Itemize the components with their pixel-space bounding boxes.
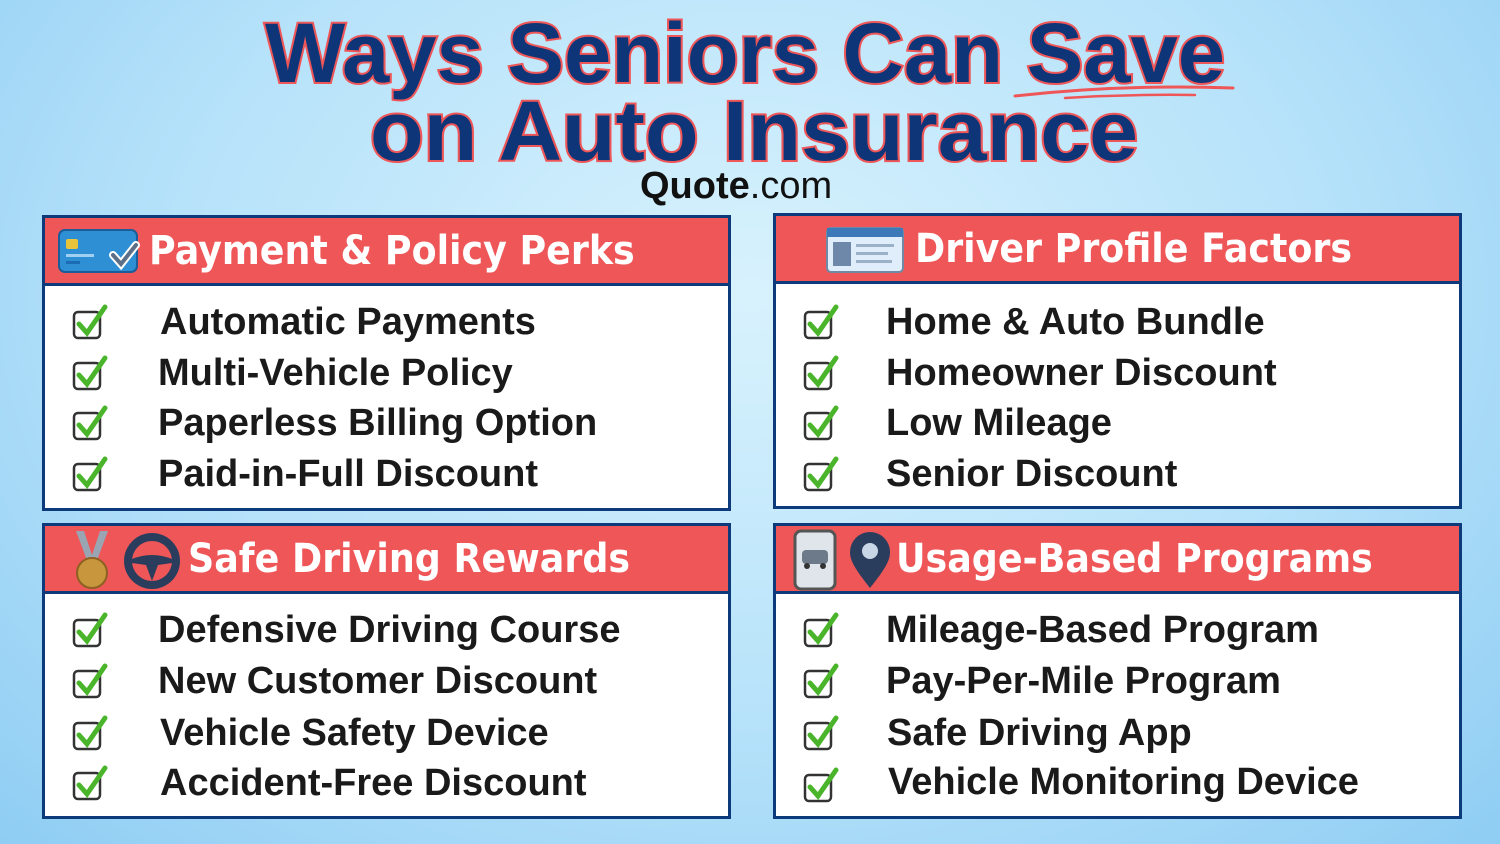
title xyxy=(262,6,1234,207)
item list: Home & Auto Bundle xyxy=(886,301,1265,343)
underline swoosh xyxy=(1015,87,1233,98)
item list: New Customer Discount xyxy=(158,660,597,702)
header xyxy=(776,526,1459,594)
item list: Homeowner Discount xyxy=(886,352,1277,394)
header: Safe Driving Rewards xyxy=(188,536,630,582)
header: Usage-Based Programs xyxy=(896,536,1373,582)
item list: Multi-Vehicle Policy xyxy=(158,352,513,394)
header xyxy=(45,218,728,286)
item list: Vehicle Monitoring Device xyxy=(888,761,1359,803)
title: Ways Seniors Can Save xyxy=(265,6,1225,100)
item list: Automatic Payments xyxy=(160,301,536,343)
panel: safe driving rewards xyxy=(42,523,731,819)
panel: payment & policy perks xyxy=(42,215,731,511)
item list xyxy=(804,609,1359,803)
item list: Low Mileage xyxy=(886,402,1112,444)
item list xyxy=(72,301,597,495)
item list xyxy=(72,609,620,804)
item list: Safe Driving App xyxy=(887,712,1192,754)
title: on Auto Insurance xyxy=(370,84,1138,178)
header xyxy=(776,216,1459,284)
item list: Accident-Free Discount xyxy=(160,762,587,804)
item list: Mileage-Based Program xyxy=(886,609,1319,651)
header: Payment & Policy Perks xyxy=(149,228,635,274)
item list: Paid-in-Full Discount xyxy=(158,453,538,495)
item list xyxy=(804,301,1277,495)
icon: medal and steering wheel xyxy=(76,531,180,589)
panel: driver profile factors xyxy=(773,213,1462,509)
item list: Vehicle Safety Device xyxy=(160,712,549,754)
item list: Paperless Billing Option xyxy=(158,402,597,444)
header: Driver Profile Factors xyxy=(915,226,1352,272)
icon: phone and map pin xyxy=(794,530,890,590)
item list: Senior Discount xyxy=(886,453,1177,495)
item list: Defensive Driving Course xyxy=(158,609,620,651)
logo: Quote.com xyxy=(640,165,832,207)
panel: usage-based programs xyxy=(773,523,1462,819)
header xyxy=(45,526,728,594)
icon: driver license xyxy=(826,227,904,273)
item list: Pay-Per-Mile Program xyxy=(886,660,1281,702)
icon: credit card xyxy=(58,229,140,273)
